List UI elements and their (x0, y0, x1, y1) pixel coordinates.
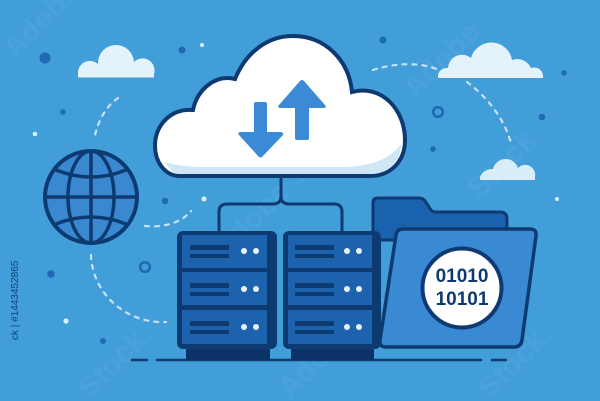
stock id text: ck | #1443452865 (10, 260, 21, 340)
main cloud with arrows (155, 36, 405, 176)
globe (45, 151, 137, 243)
up arrow (278, 80, 326, 140)
dashed paths (91, 64, 511, 322)
connector lines (219, 176, 342, 232)
binary badge: 10101 (436, 289, 489, 310)
watermarks: Stock (462, 124, 543, 205)
unit 2 (182, 272, 267, 305)
small cloud lower right (480, 159, 535, 180)
back folder (373, 198, 507, 240)
binary badge (422, 248, 502, 328)
down arrow (238, 102, 283, 158)
cloud shadow band (165, 144, 401, 174)
unit 2 (288, 272, 372, 305)
unit 1 (182, 235, 267, 268)
server rack 1 (177, 231, 277, 360)
binary badge: 01010 (436, 266, 488, 287)
unit 3 (288, 310, 372, 344)
watermarks: Adobe (397, 16, 486, 105)
unit 1 (288, 235, 372, 268)
small cloud top left (78, 45, 155, 78)
decorative dots (33, 36, 567, 344)
baseline (132, 359, 506, 361)
server rack 2 (283, 231, 381, 360)
watermarks: Adobe Stock (272, 252, 425, 401)
unit 3 (182, 310, 267, 344)
front folder with binary badge (380, 229, 536, 347)
watermarks: Adobe Stock (207, 112, 360, 265)
cloud top right (438, 42, 543, 78)
